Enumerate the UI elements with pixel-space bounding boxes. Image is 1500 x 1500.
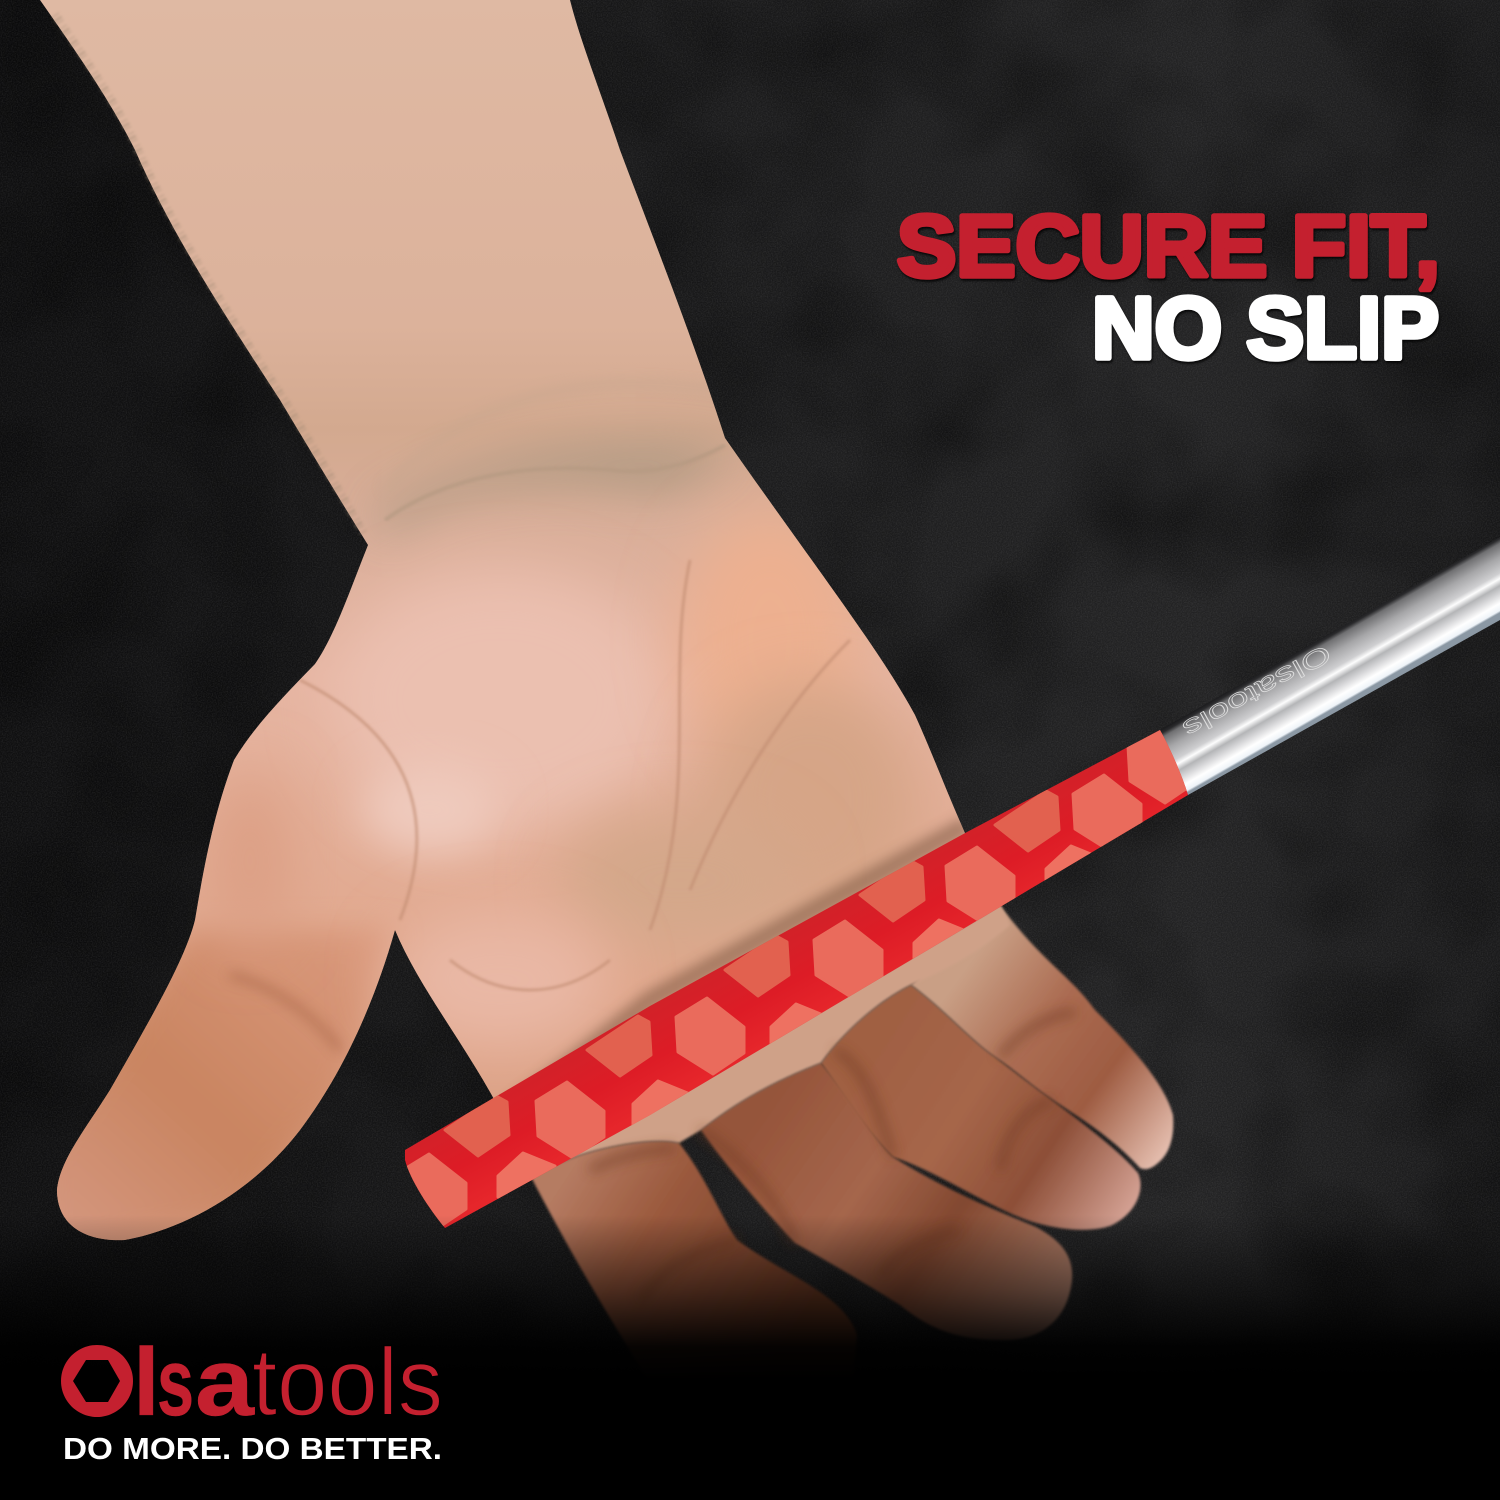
wordmark light part: tools <box>252 1329 443 1436</box>
arm, palm and thumb <box>40 0 965 1240</box>
wrist fold shadows <box>375 441 740 540</box>
index finger <box>911 905 1173 1169</box>
thumb shading <box>40 930 395 1260</box>
wordmark bold part: a <box>195 1329 255 1436</box>
red hexagon silicone grip <box>398 727 1196 1230</box>
grip cast shadow on palm <box>529 814 965 1077</box>
bottom fade to black <box>0 1215 1500 1380</box>
heading line 2: NO SLIP <box>1092 280 1439 377</box>
wordmark bold part: s <box>157 1329 194 1436</box>
hand photograph illustration <box>0 0 1173 1385</box>
ring finger <box>701 1063 1072 1340</box>
metal shaft <box>1160 537 1500 795</box>
lower hexagon pattern <box>498 846 1103 1197</box>
lower palm strip under grip <box>531 905 1010 1177</box>
heading <box>897 198 1440 377</box>
middle finger <box>821 985 1141 1230</box>
wordmark bold part: l <box>133 1329 160 1436</box>
palm creases <box>300 560 850 990</box>
icon: hexagon O <box>61 1345 133 1417</box>
pinky finger <box>531 1141 857 1385</box>
heading line 1: SECURE FIT, <box>897 198 1440 295</box>
large hexagon pattern <box>398 727 1196 1230</box>
tagline: DO MORE. DO BETTER. <box>63 1431 442 1466</box>
arm hair fringe <box>55 15 364 535</box>
finger creases <box>590 1012 1075 1300</box>
upper hexagon pattern <box>445 791 1059 1156</box>
footer black band <box>0 1379 1500 1500</box>
logo: Olsatools <box>61 1329 443 1436</box>
engraved brand on shaft: Olsatools <box>1178 639 1336 743</box>
